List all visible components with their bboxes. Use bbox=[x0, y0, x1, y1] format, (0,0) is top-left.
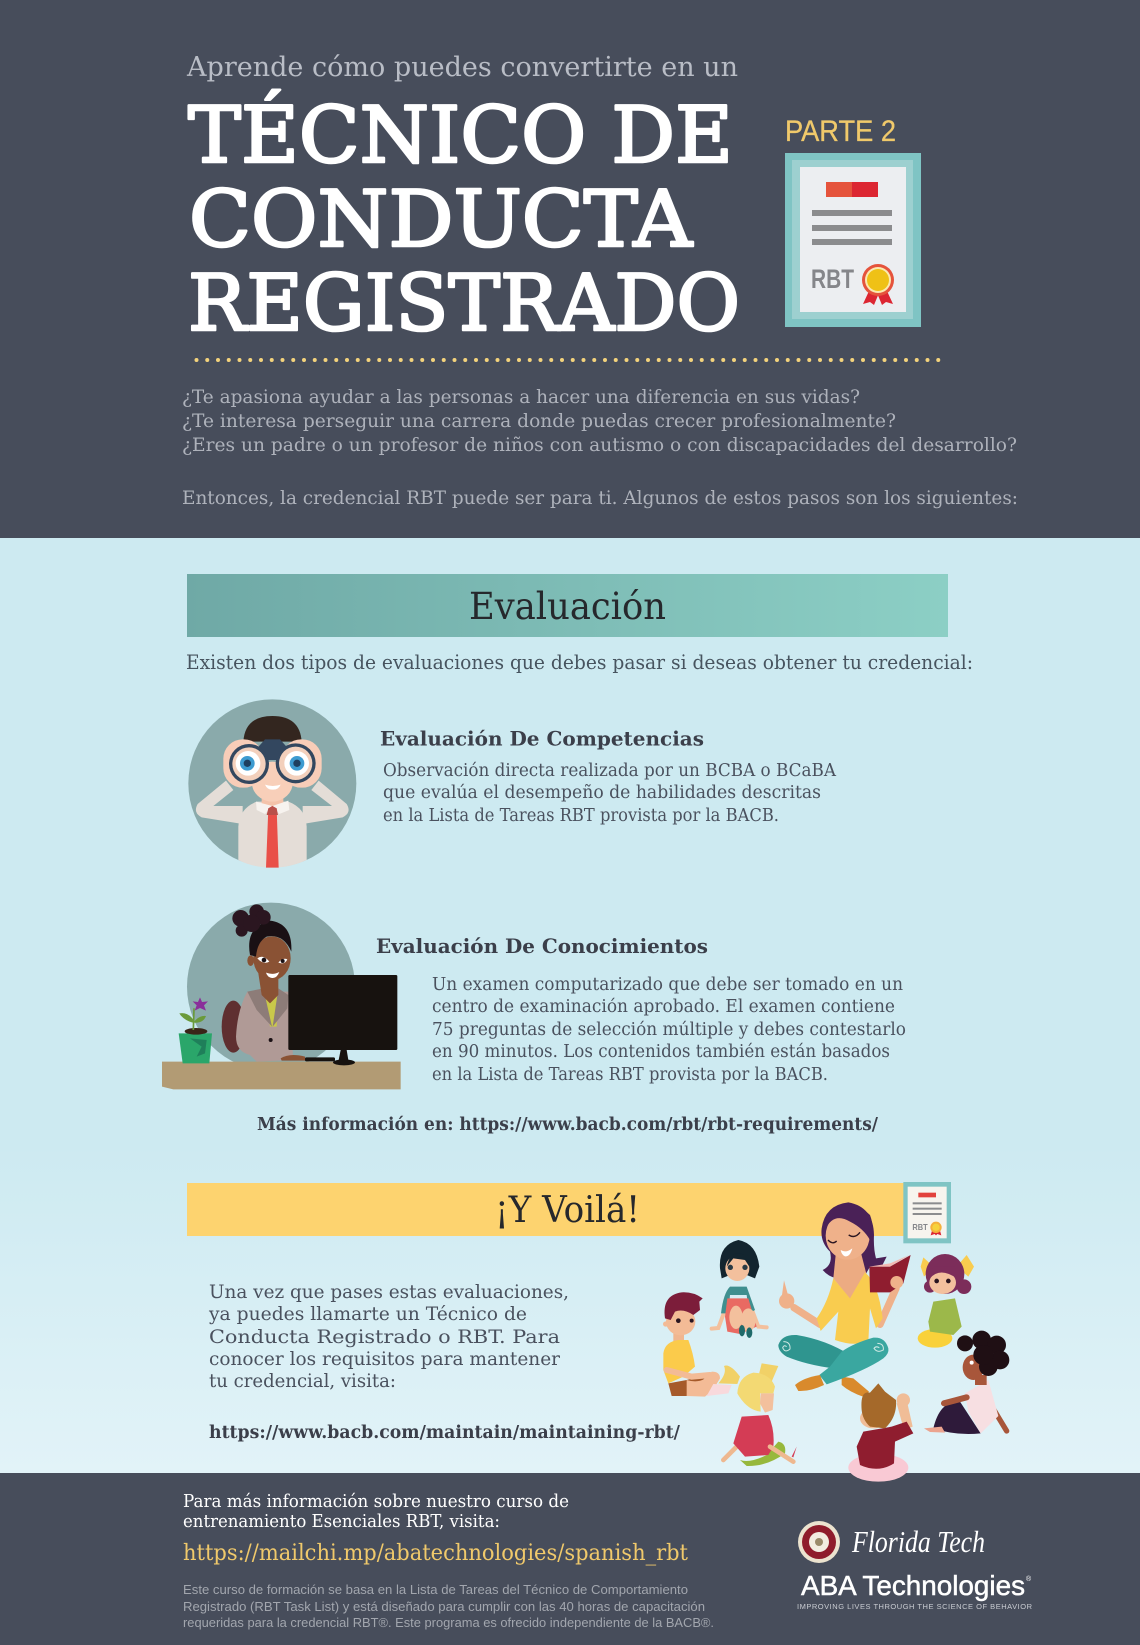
text: voila description: Una vez que pases estas evaluaciones, bbox=[209, 1282, 569, 1303]
panel: header background bbox=[0, 0, 1140, 538]
figure: blonde child bbox=[718, 1363, 797, 1466]
footer disclaimer: requeridas para la credencial RBT®. Este programa es ofrecido independiente de la BACB®. bbox=[183, 1615, 714, 1630]
text: voila description: conocer los requisitos para mantener bbox=[209, 1349, 560, 1370]
intro questions: ¿Eres un padre o un profesor de niños con autismo o con discapacidades del desarrollo? bbox=[182, 434, 1017, 456]
figure: boy yellow shirt bbox=[663, 1292, 732, 1397]
heading banner: Evaluación: Evaluación bbox=[469, 585, 666, 628]
text: more information link: Más información en: https://www.bacb.com/rbt/rbt-requirements/ bbox=[257, 1115, 879, 1135]
figure: child curly hair bbox=[924, 1331, 1009, 1434]
intro conclusion: Entonces, la credencial RBT puede ser para ti. Algunos de estos pasos son los siguientes: bbox=[182, 487, 1018, 509]
title bbox=[188, 89, 740, 349]
logo: ABA Technologies: IMPROVING LIVES THROUGH THE SCIENCE OF BEHAVIOR bbox=[797, 1602, 1033, 1611]
divider: dotted line bbox=[196, 358, 941, 362]
text: competencias description bbox=[383, 761, 836, 826]
footer text: course information: Para más información sobre nuestro curso de bbox=[183, 1491, 569, 1512]
text: voila description: Conducta Registrado o RBT. Para bbox=[209, 1327, 560, 1348]
heading banner: Evaluación bbox=[187, 574, 948, 637]
label: parte 2: PARTE 2 bbox=[785, 115, 896, 148]
text: voila description: tu credencial, visita: bbox=[209, 1371, 396, 1392]
icon: small certificate bbox=[903, 1182, 951, 1243]
text: voila description: ya puedes llamarte un Técnico de bbox=[208, 1304, 527, 1325]
logo: ABA Technologies: ® bbox=[1026, 1575, 1032, 1583]
logo: Florida Tech: Florida Tech bbox=[851, 1524, 985, 1559]
footer disclaimer bbox=[183, 1582, 714, 1630]
panel: footer background bbox=[0, 1473, 1140, 1645]
figure: teacher bbox=[778, 1202, 911, 1397]
text: competencias description: en la Lista de Tareas RBT provista por la BACB. bbox=[383, 806, 779, 826]
text: conocimientos description: centro de examinación aprobado. El examen contiene bbox=[432, 997, 895, 1017]
footer link: https://mailchi.mp/abatechnologies/spanish_rbt bbox=[183, 1541, 688, 1566]
evaluation intro text: Existen dos tipos de evaluaciones que debes pasar si deseas obtener tu credencial: bbox=[186, 651, 973, 674]
footer disclaimer: Este curso de formación se basa en la Lista de Tareas del Técnico de Comportamiento bbox=[183, 1582, 688, 1597]
icon: small certificate: RBT bbox=[912, 1222, 928, 1232]
text: competencias description: que evalúa el desempeño de habilidades descritas bbox=[383, 783, 821, 803]
title: TÉCNICO DE bbox=[188, 89, 733, 181]
icon: man with binoculars bbox=[188, 699, 356, 868]
text: conocimientos description: en 90 minutos. Los contenidos también están basados bbox=[432, 1042, 890, 1062]
icon: RBT certificate: RBT bbox=[811, 264, 854, 294]
figure: child black hair bbox=[712, 1240, 767, 1338]
title: CONDUCTA bbox=[189, 175, 694, 265]
text: conocimientos description: 75 preguntas de selección múltiple y debes contestarlo bbox=[432, 1020, 906, 1040]
footer disclaimer: Registrado (RBT Task List) y está diseñado para cumplir con las 40 horas de capacitación bbox=[183, 1599, 705, 1614]
text: conocimientos description bbox=[432, 975, 906, 1085]
icon: woman at desk bbox=[162, 903, 401, 1089]
heading banner: ¡Y Voilá! bbox=[187, 1183, 904, 1236]
footer text: course information: entrenamiento Esenciales RBT, visita: bbox=[183, 1511, 500, 1532]
intro questions: ¿Te apasiona ayudar a las personas a hacer una diferencia en sus vidas? bbox=[182, 386, 860, 408]
title: REGISTRADO bbox=[188, 259, 740, 349]
illustration: teacher and children bbox=[663, 1182, 1009, 1482]
heading banner: ¡Y Voilá!: ¡Y Voilá! bbox=[495, 1190, 640, 1231]
footer text: course information bbox=[183, 1491, 569, 1532]
text: conocimientos description: Un examen computarizado que debe ser tomado en un bbox=[432, 975, 903, 995]
text: voila description bbox=[208, 1282, 569, 1392]
icon: RBT certificate bbox=[785, 153, 921, 327]
heading: Evaluación De Conocimientos: Evaluación De Conocimientos bbox=[376, 934, 708, 958]
subtitle: Aprende cómo puedes convertirte en un bbox=[186, 52, 738, 83]
logo: ABA Technologies: ABA Technologies bbox=[801, 1570, 1025, 1601]
figure: child brown hair from behind bbox=[848, 1383, 913, 1482]
intro questions bbox=[182, 386, 1017, 456]
heading: Evaluación De Competencias: Evaluación De Competencias bbox=[380, 726, 704, 750]
text: competencias description: Observación directa realizada por un BCBA o BCaBA bbox=[383, 761, 836, 781]
figure: child right girl bbox=[918, 1254, 974, 1348]
intro questions: ¿Te interesa perseguir una carrera donde puedas crecer profesionalmente? bbox=[182, 410, 896, 432]
text: conocimientos description: en la Lista de Tareas RBT provista por la BACB. bbox=[432, 1065, 828, 1085]
text: maintain link: https://www.bacb.com/maintain/maintaining-rbt/ bbox=[209, 1423, 681, 1443]
panel: evaluation background bbox=[0, 538, 1140, 1473]
logo: Florida Tech bbox=[798, 1521, 985, 1563]
